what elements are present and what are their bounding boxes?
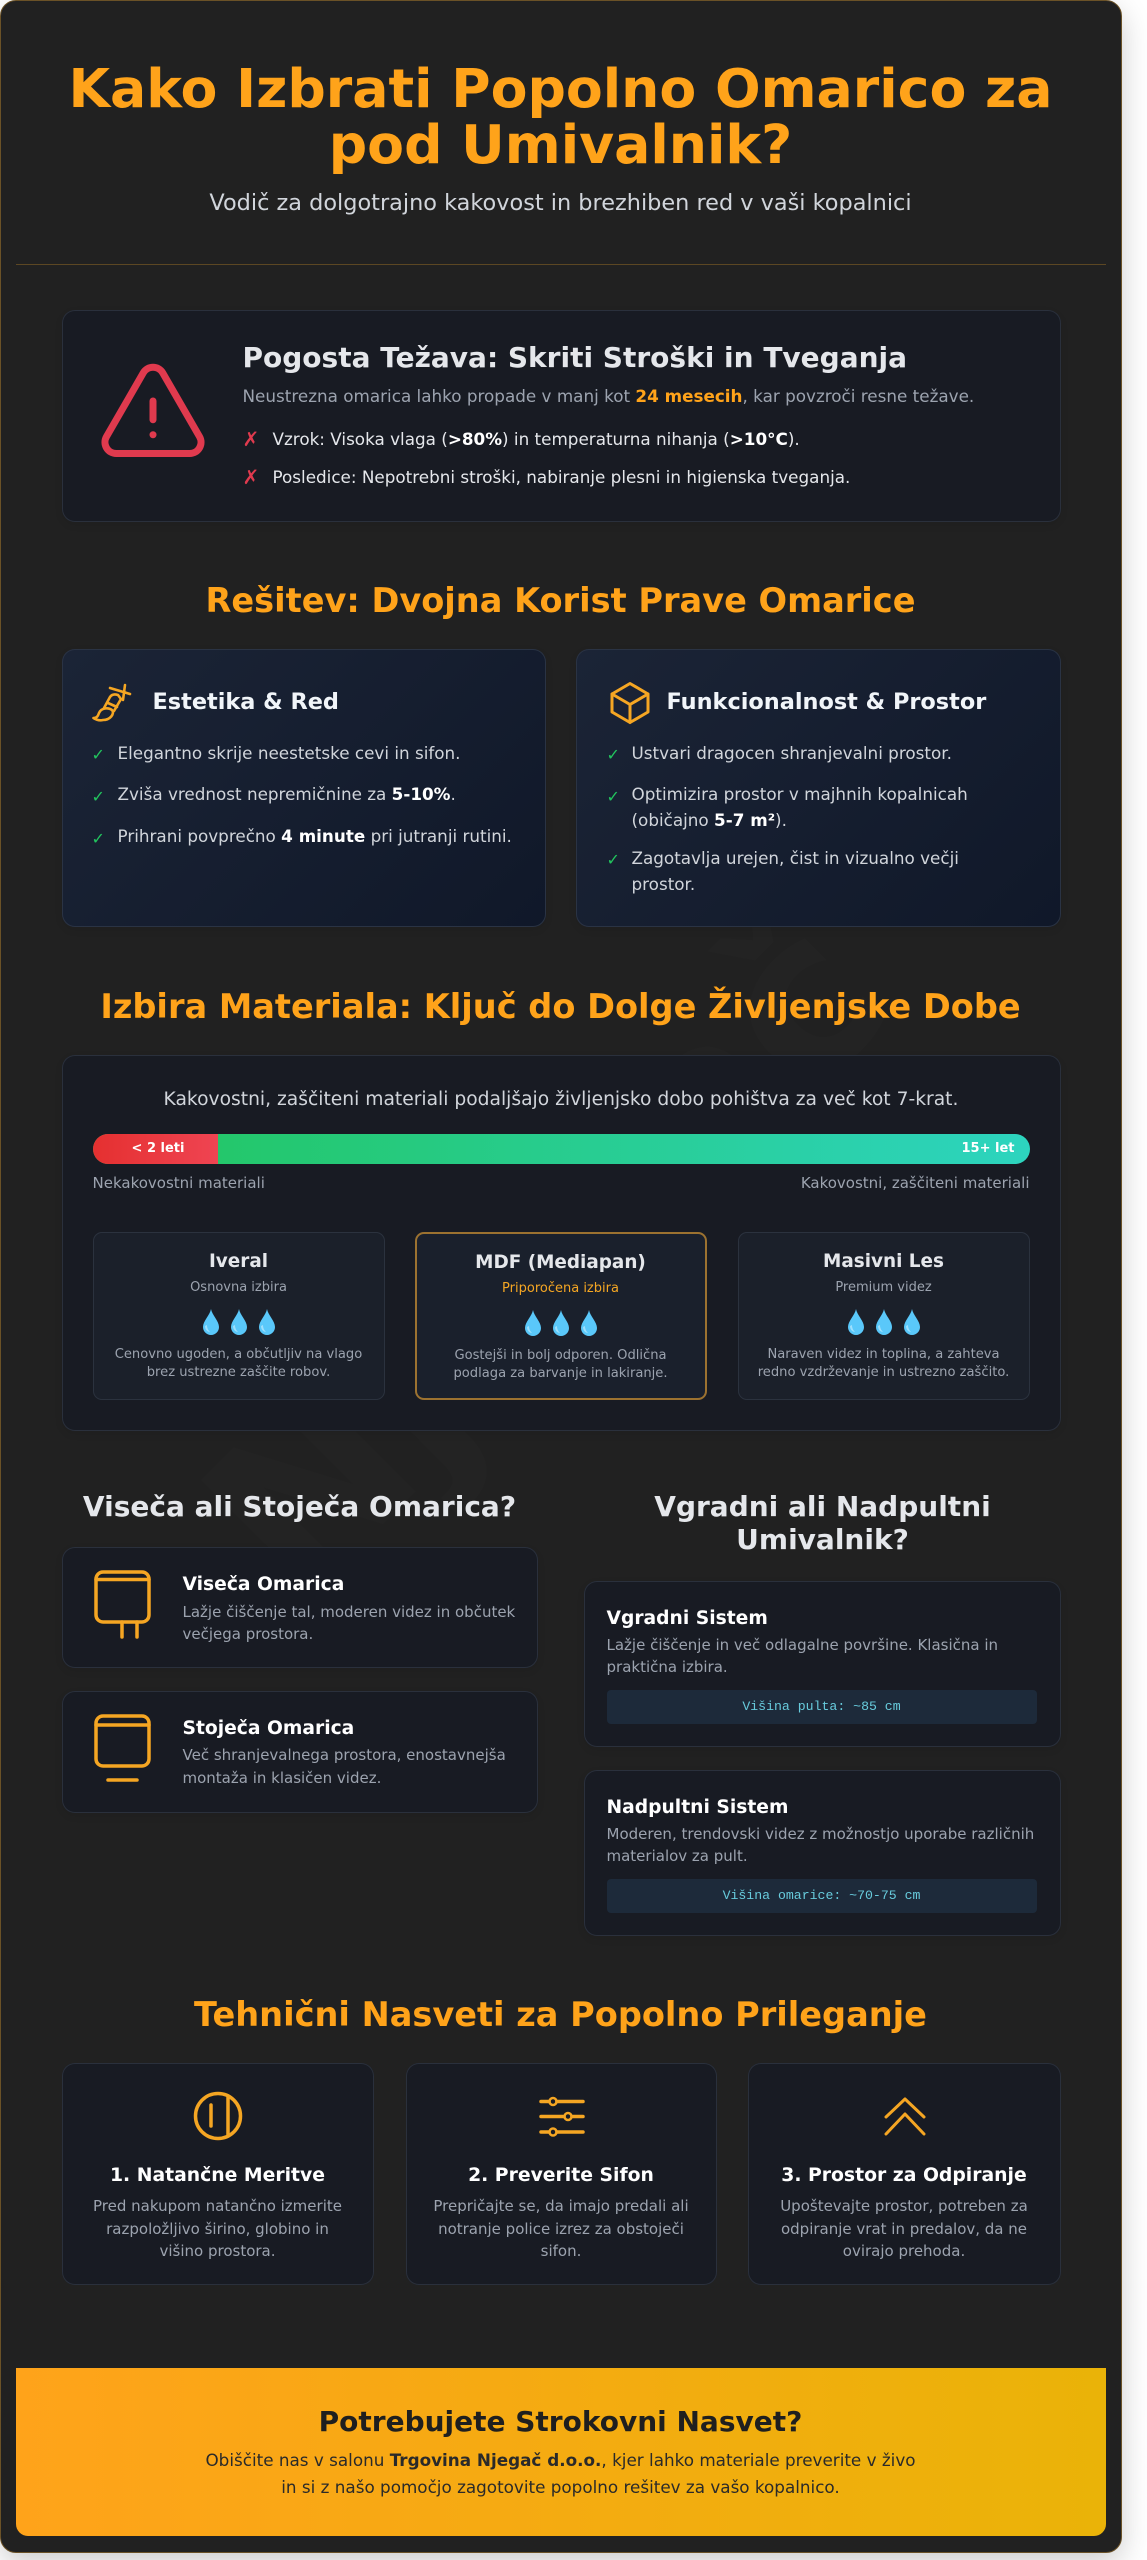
footer text: Obiščite nas v salonu Trgovina Njegač d.o.o., kjer lahko materiale preverite v živo: [205, 2450, 916, 2470]
heading: built-in or countertop: [654, 1490, 991, 1556]
benefit list: (običajno 5-7 m²).: [632, 810, 787, 830]
card text: Lažje čiščenje tal, moderen videz in občutek: [182, 1602, 515, 1620]
panel: tip 3: [748, 2062, 1060, 2284]
materials intro: Kakovostni, zaščiteni materiali podaljšajo življenjsko dobo pohištva za več kot 7-krat.: [164, 1088, 958, 1110]
panel: hanging cabinet: [62, 1546, 538, 1668]
panel: hanging cabinet: večjega prostora.: [182, 1624, 313, 1642]
tip text: Upoštevajte prostor, potreben za: [780, 2196, 1028, 2214]
card text: Lažje čiščenje in več odlagalne površine. Klasična in: [606, 1636, 998, 1654]
panel: built-in basin: [584, 1580, 1060, 1746]
icon: sliders: [539, 2096, 585, 2137]
benefit list: Ustvari dragocen shranjevalni prostor.: [632, 742, 952, 762]
footer call to action: [16, 2368, 1106, 2536]
problem text: Neustrezna omarica lahko propade v manj kot 24 mesecih, kar povzroči resne težave.: [242, 386, 974, 406]
benefit list: [606, 742, 968, 894]
material card: iveral: Iveral: [209, 1250, 268, 1272]
icon: paint brush: [92, 684, 132, 722]
title: pod Umivalnik?: [329, 112, 792, 176]
footer call to action: in si z našo pomočjo zagotovite popolno rešitev za vašo kopalnico.: [281, 2476, 840, 2496]
icon: water drops: [203, 1309, 275, 1335]
cause row: ✗: [242, 426, 259, 450]
card heading: Funkcionalnost & Prostor: [666, 688, 986, 714]
material card: iveral: [92, 1232, 384, 1400]
material card: MDF recommended: Priporočena izbira: [502, 1280, 619, 1296]
material card: solid wood: Naraven videz in toplina, a zahteva: [767, 1346, 1000, 1362]
material card: iveral: brez ustrezne zaščite robov.: [147, 1364, 330, 1380]
benefit list: ✓: [606, 786, 620, 806]
watermark: Njegač: [155, 865, 934, 1644]
bar label right: Kakovostni, zaščiteni materiali: [801, 1174, 1030, 1192]
tip text: Pred nakupom natančno izmerite: [93, 2196, 342, 2214]
panel: standing cabinet: [62, 1690, 538, 1812]
panel: countertop basin: materialov za pult.: [606, 1846, 748, 1864]
icon: water drops: [525, 1310, 597, 1336]
icon: warning triangle: [101, 364, 205, 457]
panel: common problem: [62, 310, 1060, 522]
long lifespan label: 15+ let: [962, 1140, 1014, 1156]
benefit list: Elegantno skrije neestetske cevi in sifon.: [118, 742, 461, 762]
panel: built-in basin: praktična izbira.: [606, 1658, 728, 1676]
bar label left: Nekakovostni materiali: [92, 1174, 265, 1192]
material card: iveral: Cenovno ugoden, a občutljiv na vlago: [115, 1346, 362, 1362]
card heading: Nadpultni Sistem: [606, 1796, 788, 1818]
material card: MDF recommended: Gostejši in bolj odporen. Odlična: [454, 1348, 667, 1362]
icon: double chevron up: [884, 2097, 926, 2136]
heading: solution: Rešitev: Dvojna Korist Prave Omarice: [206, 580, 915, 620]
lifespan bar: [92, 1134, 1030, 1164]
benefit list: Zviša vrednost nepremičnine za 5-10%.: [118, 784, 456, 804]
card heading: Stoječa Omarica: [182, 1718, 354, 1738]
consequence row: ✗: [242, 464, 259, 488]
card text: Moderen, trendovski videz z možnostjo uporabe različnih: [606, 1824, 1034, 1842]
benefit list: Zagotavlja urejen, čist in vizualno večji: [632, 848, 959, 868]
card heading: Viseča Omarica: [182, 1574, 344, 1594]
panel: tip 2: sifon.: [541, 2242, 581, 2260]
title: [68, 56, 1053, 176]
benefit list: Prihrani povprečno 4 minute pri jutranji rutini.: [118, 826, 512, 846]
panel: standing cabinet: montaža in klasičen videz.: [182, 1768, 381, 1786]
short lifespan segment: [92, 1134, 218, 1164]
heading: built-in or countertop: Vgradni ali Nadpultni: [654, 1490, 991, 1522]
benefit list: ✓: [92, 744, 105, 764]
icon: water drops: [848, 1309, 920, 1335]
material card: MDF recommended: MDF (Mediapan): [475, 1252, 646, 1272]
benefit list: ✓: [92, 828, 105, 848]
benefit list: ✓: [606, 850, 620, 868]
footer heading: Potrebujete Strokovni Nasvet?: [319, 2404, 802, 2438]
benefit list: prostor.: [632, 874, 695, 894]
height chip: Višina omarice: ~70-75 cm: [723, 1888, 920, 1902]
panel: tip 1: višino prostora.: [159, 2242, 276, 2260]
material card: iveral: Osnovna izbira: [190, 1280, 287, 1294]
height chip: [606, 1878, 1036, 1912]
card text: Več shranjevalnega prostora, enostavnejša: [182, 1746, 506, 1764]
panel: materials: [62, 1054, 1060, 1430]
panel: tip 3: odpiranje vrat in predalov, da ne: [781, 2220, 1027, 2238]
heading: materials: Izbira Materiala: Ključ do Dolge Življenjske Dobe: [100, 986, 1021, 1026]
title: Kako Izbrati Popolno Omarico za: [68, 56, 1053, 120]
material card: solid wood: Premium videz: [835, 1280, 932, 1294]
material card: MDF recommended: podlaga za barvanje in lakiranje.: [453, 1366, 668, 1380]
panel: tip 2: [406, 2062, 716, 2284]
heading: technical tips: Tehnični Nasveti za Popolno Prileganje: [194, 1994, 927, 2034]
benefit list: [92, 742, 512, 848]
panel: countertop basin: [584, 1770, 1060, 1936]
panel: tip 3: ovirajo prehoda.: [843, 2242, 965, 2260]
header divider line: [16, 264, 1106, 265]
height chip: Višina pulta: ~85 cm: [742, 1698, 901, 1714]
material card: solid wood: [738, 1232, 1030, 1400]
benefit list: ✓: [92, 786, 105, 806]
problem heading: Pogosta Težava: Skriti Stroški in Tveganja: [242, 340, 907, 374]
material card: solid wood: Masivni Les: [823, 1250, 944, 1272]
panel: functionality: [576, 648, 1060, 926]
benefit list: ✓: [606, 744, 620, 764]
heading: built-in or countertop: Umivalnik?: [736, 1522, 909, 1556]
icon: standing cabinet: [94, 1714, 151, 1782]
material card: solid wood: redno vzdrževanje in ustrezno zaščito.: [758, 1364, 1009, 1380]
tip title: 3. Prostor za Odpiranje: [781, 2164, 1027, 2186]
height chip: [606, 1690, 1036, 1724]
panel: aesthetics: [62, 648, 546, 926]
tip title: 1. Natančne Meritve: [110, 2164, 325, 2186]
tip text: Prepričajte se, da imajo predali ali: [433, 2196, 689, 2214]
panel: tip 2: notranje police izrez za obstoječi: [438, 2220, 684, 2238]
subtitle: Vodič za dolgotrajno kakovost in brezhiben red v vaši kopalnici: [209, 190, 912, 216]
tip title: 2. Preverite Sifon: [468, 2164, 654, 2186]
short lifespan segment: < 2 leti: [132, 1140, 184, 1156]
benefit list: Optimizira prostor v majhnih kopalnicah: [632, 784, 968, 804]
panel: tip 1: [62, 2062, 374, 2284]
panel: tip 1: razpoložljivo širino, globino in: [106, 2220, 329, 2238]
material card: MDF recommended: [414, 1232, 706, 1400]
consequence row: Posledice: Nepotrebni stroški, nabiranje plesni in higienska tveganja.: [272, 466, 850, 486]
icon: hanging cabinet: [94, 1570, 151, 1639]
card heading: Vgradni Sistem: [606, 1608, 768, 1628]
heading: hanging or standing: Viseča ali Stoječa Omarica?: [83, 1490, 516, 1522]
card heading: Estetika & Red: [152, 688, 339, 714]
icon: cube: [610, 682, 650, 724]
cause row: Vzrok: Visoka vlaga (>80%) in temperaturna nihanja (>10°C).: [272, 428, 800, 448]
icon: measuring circle: [194, 2092, 242, 2140]
